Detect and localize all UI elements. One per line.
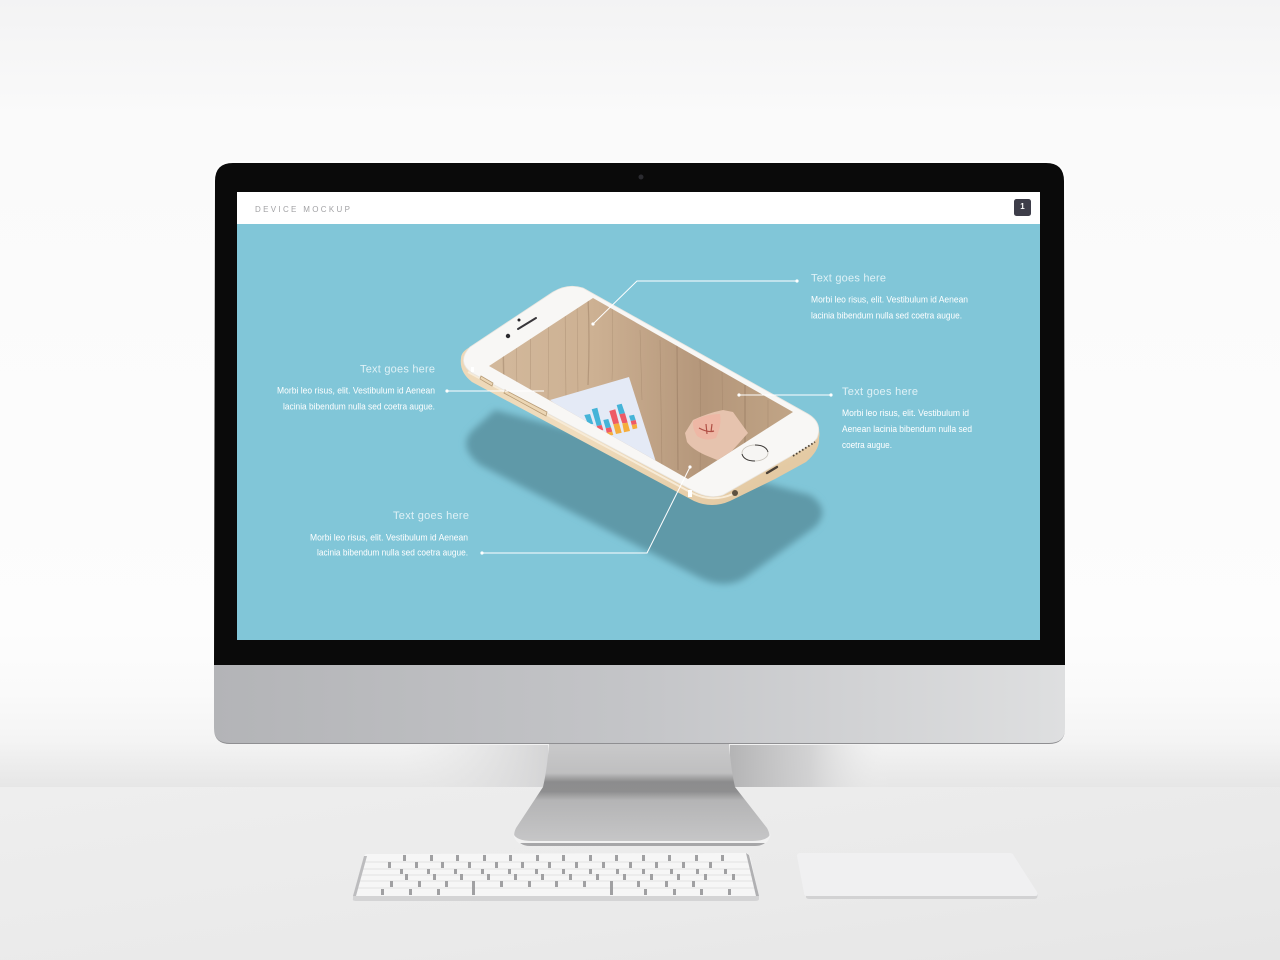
text block right [842, 386, 972, 451]
keyboard edge [353, 896, 759, 901]
text block right: Aenean lacinia bibendum nulla sed [842, 424, 972, 435]
text block top right: lacinia bibendum nulla sed coetra augue. [811, 310, 962, 322]
gold rim [461, 288, 820, 505]
text block left [277, 364, 435, 412]
home button [742, 445, 768, 461]
fist [685, 410, 748, 462]
text block top right [811, 272, 968, 322]
header title: DEVICE MOCKUP [255, 205, 350, 214]
monitor [213, 161, 1066, 744]
headphone jack [732, 490, 738, 496]
key row lines [356, 862, 756, 888]
volume buttons [480, 376, 547, 416]
lightning port [767, 467, 777, 473]
callout 2 leader [445, 389, 544, 393]
camera [638, 174, 644, 180]
phone mockup [461, 286, 820, 505]
callout 3 leader [737, 393, 833, 397]
text block left: lacinia bibendum nulla sed coetra augue. [283, 402, 435, 412]
chin lower edge [214, 730, 1065, 744]
stand neck and foot [514, 744, 769, 841]
text block top right: Text goes here [811, 272, 886, 284]
trackpad edge [806, 894, 1038, 899]
text block bottom left: Text goes here [393, 510, 469, 522]
antenna bands [471, 367, 692, 497]
page number badge [1014, 199, 1031, 216]
text block bottom left: lacinia bibendum nulla sed coetra augue. [317, 548, 468, 558]
text block bottom left [310, 510, 469, 558]
stand foot lip [513, 833, 771, 846]
text block bottom left: Morbi leo risus, elit. Vestibulum id Aenean [310, 532, 468, 544]
stand cast shadow left [400, 745, 548, 787]
monitor halo edge [213, 161, 1066, 681]
rim highlight [468, 372, 733, 498]
black bezel [214, 163, 1065, 665]
keyboard [353, 853, 759, 901]
text block right: Morbi leo risus, elit. Vestibulum id [842, 408, 969, 419]
text block top right: Morbi leo risus, elit. Vestibulum id Aenean [811, 294, 968, 306]
desk surface [0, 787, 1280, 960]
wood grain [503, 298, 768, 480]
keyboard right side [746, 853, 759, 896]
page number badge: 1 [1020, 202, 1025, 211]
phone shadow [466, 410, 822, 584]
trackpad surface [797, 853, 1038, 896]
text block right: coetra augue. [842, 440, 892, 451]
monitor stand [513, 744, 771, 846]
front camera [506, 334, 510, 338]
wooden screen [489, 298, 793, 479]
proximity sensor [518, 318, 520, 322]
key gaps [381, 855, 735, 895]
callout 4 leader [480, 465, 692, 555]
trackpad [797, 853, 1038, 899]
text block right: Text goes here [842, 386, 918, 398]
white face [463, 286, 819, 497]
screen slide [237, 192, 1040, 640]
keyboard base [353, 853, 759, 901]
speaker holes [793, 442, 815, 456]
stand cast shadow right [730, 745, 890, 787]
speaker [518, 318, 536, 329]
callout 1 leader [591, 279, 799, 326]
silver chin [214, 660, 1065, 744]
paper chart [550, 377, 656, 462]
text block left: Text goes here [360, 364, 435, 376]
keyboard left side [353, 856, 367, 896]
header bar [237, 192, 1040, 224]
text block left: Morbi leo risus, elit. Vestibulum id Aenean [277, 386, 435, 396]
stand foot lower edge [520, 843, 765, 846]
teal slide background [237, 224, 1040, 640]
